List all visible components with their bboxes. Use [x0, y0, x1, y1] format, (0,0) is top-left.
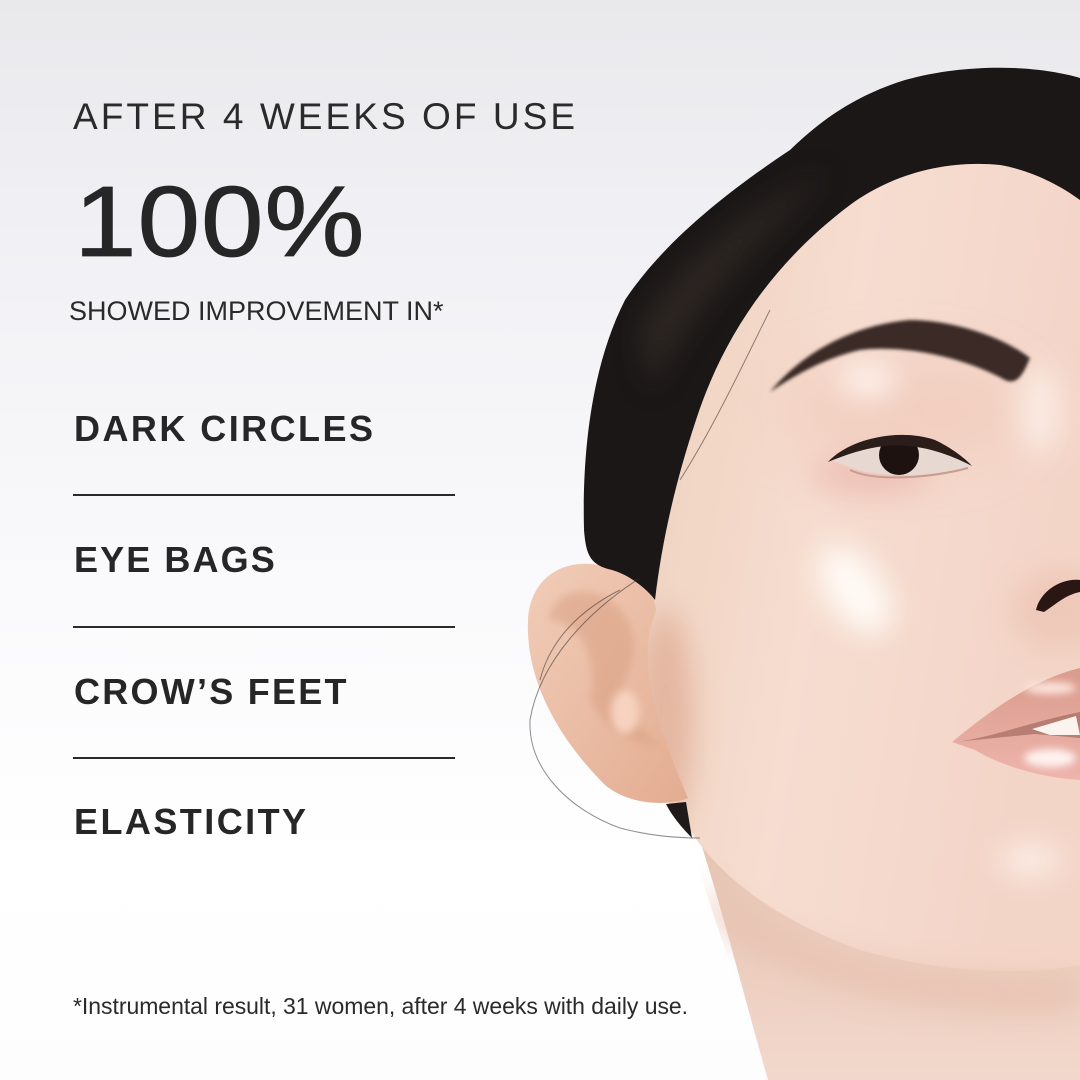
- hair: [584, 68, 1080, 600]
- ear: [528, 564, 688, 803]
- portrait photo of woman's face: [528, 68, 1080, 1080]
- hair sheen: [640, 170, 830, 390]
- subtitle: after 4 weeks of use: AFTER 4 WEEKS OF USE: [73, 96, 578, 137]
- list item: eye bags: EYE BAGS: [74, 539, 277, 580]
- eyebrow: [770, 320, 1030, 392]
- nostril: [1036, 580, 1080, 612]
- footnote: *Instrumental result, 31 women, after 4 weeks with daily use.: [73, 993, 688, 1019]
- face shading and highlights: [637, 360, 1080, 1012]
- list item: elasticity: ELASTICITY: [74, 801, 309, 842]
- stray hairs: [530, 310, 770, 838]
- lips: [952, 668, 1080, 780]
- caption: showed improvement in: SHOWED IMPROVEMENT IN*: [69, 296, 444, 326]
- eye: [828, 435, 972, 477]
- neck: [695, 825, 1080, 1080]
- big statistic: 100%: 100%: [74, 166, 365, 278]
- list item: dark circles: DARK CIRCLES: [74, 408, 375, 449]
- hair behind jaw: [666, 802, 692, 838]
- face skin: [639, 150, 1080, 971]
- list item: crow's feet: CROW’S FEET: [74, 671, 349, 712]
